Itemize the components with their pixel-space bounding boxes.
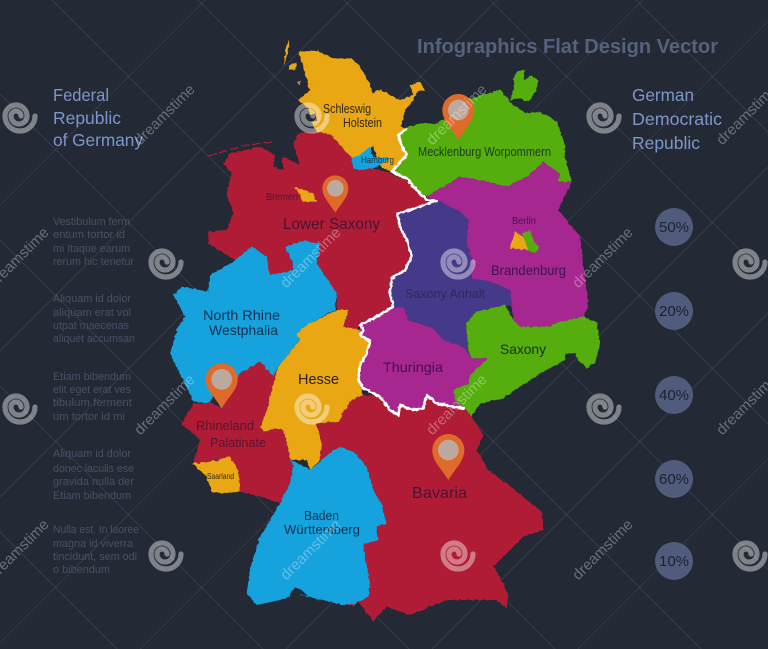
map labels: Württemberg — [284, 522, 360, 537]
chart: percentage circles: 60% — [659, 471, 689, 488]
heading: German Democratic Republic: Democratic — [632, 109, 722, 129]
map labels: Hamburg — [361, 155, 394, 166]
chart: percentage circles — [655, 208, 693, 580]
region: East Frisian islands — [208, 142, 273, 156]
map of Germany — [170, 39, 600, 622]
watermark: spirals — [5, 105, 765, 569]
chart: percentage circles: 50% — [659, 219, 689, 236]
region: Thuringia — [358, 307, 488, 415]
map labels: North Rhine — [203, 307, 280, 323]
text block: left column placeholder copy: magna id viverra — [53, 538, 134, 550]
heading: German Democratic Republic — [632, 85, 722, 153]
chart: percentage circles: 10% — [659, 553, 689, 570]
heading: German Democratic Republic: Republic — [632, 133, 700, 153]
map labels: Brandenburg — [491, 262, 566, 278]
map labels: Saxony Anhalt — [405, 286, 485, 301]
map labels: Mecklenburg Worpommern — [418, 144, 551, 159]
region: Saarland — [192, 457, 240, 493]
chart: percentage circles: 40% — [659, 387, 689, 404]
region: Schleswig-Holstein — [284, 39, 425, 172]
map labels: Saxony — [500, 341, 546, 357]
text block: left column placeholder copy: gravida nulla der — [53, 476, 134, 488]
heading: Federal Republic of Germany: Republic — [53, 108, 121, 128]
text block: left column placeholder copy: Vestibulum ferm — [53, 216, 130, 228]
text block: left column placeholder copy: utpat maecenas — [53, 320, 129, 332]
region: Lower Saxony — [208, 132, 435, 330]
map labels: Westphalia — [209, 322, 278, 338]
map labels: Holstein — [343, 115, 382, 130]
text block: left column placeholder copy: tincidunt, sem odi — [53, 551, 137, 563]
map labels: Schleswig — [323, 101, 371, 116]
map labels: Rhineland — [196, 418, 254, 433]
region: Bremen — [293, 187, 317, 202]
map labels: Lower Saxony — [283, 216, 380, 233]
icon: map pin Mecklenburg — [442, 94, 474, 140]
inner border: former East/West boundary — [358, 128, 465, 415]
heading: Federal Republic of Germany: Federal — [53, 85, 109, 105]
watermark: dreamstime text: dreamstime — [423, 81, 491, 149]
heading: German Democratic Republic: German — [632, 85, 694, 105]
region: Rhineland-Palatinate — [182, 362, 293, 503]
chart: percentage circles: 20% — [659, 303, 689, 320]
region: Hesse — [260, 309, 370, 470]
text block: left column placeholder copy: Etiam bibendum — [53, 490, 131, 502]
text block: left column placeholder copy: Aliquam id dolor — [53, 448, 131, 460]
region: Saxony-Anhalt — [390, 202, 512, 358]
map labels — [196, 101, 566, 537]
heading: Federal Republic of Germany — [53, 85, 143, 150]
watermark: dreamstime text: dreamstime — [131, 371, 199, 439]
watermark: dreamstime text: dreamstime — [277, 516, 345, 584]
region: Baden-Württemberg — [247, 447, 387, 605]
icon: map pin Lower Saxony — [322, 175, 348, 213]
text block: left column placeholder copy: rerum hic tenetur — [53, 256, 134, 268]
watermark: dreamstime text — [0, 81, 768, 584]
text block: left column placeholder copy: entum tortor id — [53, 229, 125, 241]
text block: left column placeholder copy: Nulla est. In laoree — [53, 524, 139, 536]
watermark: dreamstime text: dreamstime — [569, 224, 637, 292]
watermark: dreamstime text: dreamstime — [423, 371, 491, 439]
region: Saxony — [453, 305, 600, 417]
region: Mecklenburg-Vorpommern — [392, 69, 572, 197]
region: Berlin — [510, 230, 540, 253]
heading: Federal Republic of Germany: of Germany — [53, 130, 143, 150]
map labels: Baden — [304, 508, 339, 523]
text block: left column placeholder copy: tibulum ferment — [53, 397, 132, 409]
watermark: dreamstime text: dreamstime — [569, 516, 637, 584]
map labels: Hesse — [298, 371, 339, 388]
text block: left column placeholder copy: Aliquam id dolor — [53, 293, 131, 305]
text block: left column placeholder copy: mi Itaque earum — [53, 243, 130, 255]
map labels: Bavaria — [412, 485, 467, 502]
region: Bavaria — [317, 395, 543, 622]
map labels: Saarland — [207, 471, 234, 481]
map labels: Thuringia — [383, 359, 443, 375]
map labels: Palatinate — [210, 435, 266, 450]
map labels: Berlin — [512, 216, 536, 227]
text block: left column placeholder copy: Etiam bibendum — [53, 371, 131, 383]
text block: left column placeholder copy: donec iaculis ese — [53, 463, 134, 475]
region: Hamburg — [352, 147, 390, 170]
watermark: dreamstime text: dreamstime — [277, 224, 345, 292]
map labels: Bremen — [266, 192, 298, 203]
watermark: dreamstime text: dreamstime — [131, 81, 199, 149]
text block: left column placeholder copy: um tortor id mi — [53, 411, 125, 423]
icon: map pin Rhineland — [206, 363, 238, 408]
text block: left column placeholder copy: aliquet accumsan — [53, 333, 135, 345]
title: Infographics Flat Design Vector — [417, 36, 718, 58]
text block: left column placeholder copy: o bibendum — [53, 564, 110, 576]
lake and inlets — [290, 113, 317, 598]
region: Brandenburg — [427, 162, 588, 327]
text block: left column placeholder copy — [53, 216, 139, 576]
region: North Rhine-Westphalia — [170, 241, 337, 408]
text block: left column placeholder copy: elit eget erat ves — [53, 384, 131, 396]
text block: left column placeholder copy: aliquam erat vol — [53, 307, 131, 319]
icon: map pin Bavaria — [432, 434, 464, 480]
